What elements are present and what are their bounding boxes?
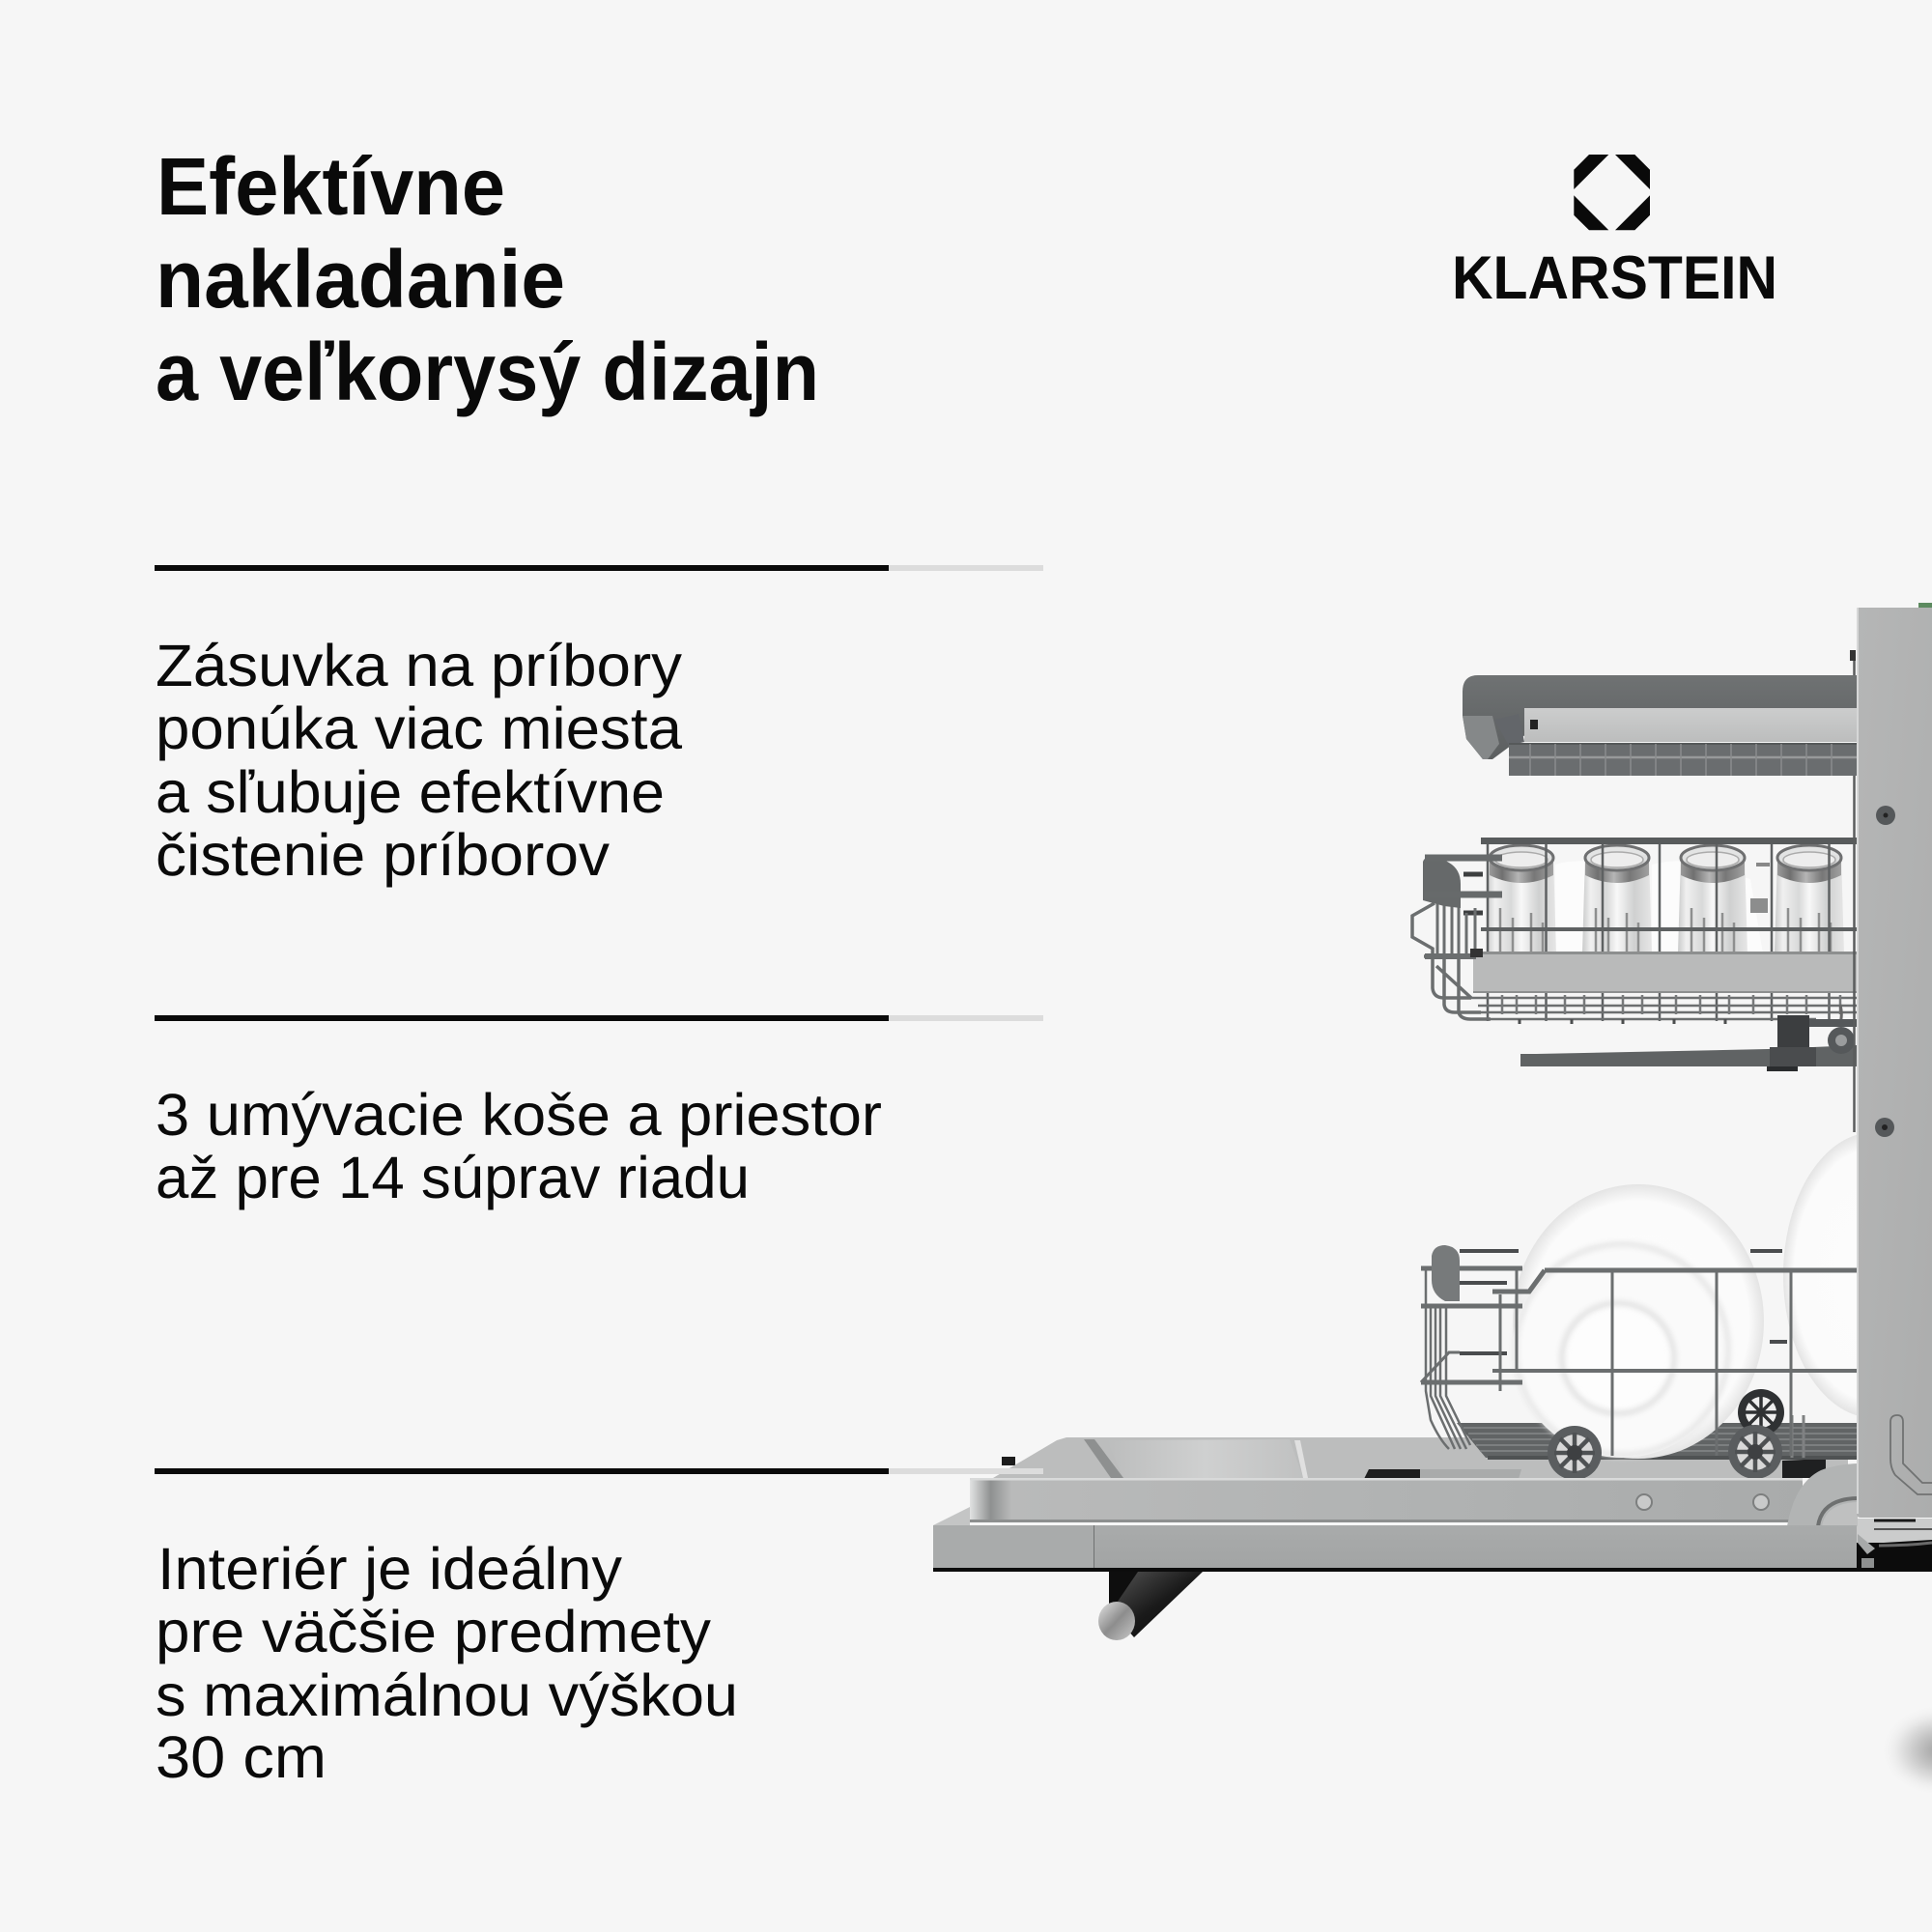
- basket wires: [1421, 1251, 1857, 1456]
- divider: [155, 565, 1043, 571]
- text: [156, 633, 683, 888]
- panel slot: [1890, 1415, 1932, 1494]
- title: [156, 141, 819, 417]
- spray arm: [1520, 1005, 1858, 1071]
- text: 30 cm: [156, 1724, 327, 1790]
- text: [156, 1082, 882, 1210]
- plate large: [1513, 1184, 1764, 1459]
- frame screw 2: [1753, 1494, 1769, 1510]
- rack wires: [1488, 844, 1830, 1021]
- frame screw 1: [1636, 1494, 1652, 1510]
- glass 1: [1487, 845, 1556, 953]
- plates behind glasses: [1555, 861, 1763, 953]
- title: Efektívne: [156, 141, 505, 232]
- basket floor: [1457, 1415, 1857, 1458]
- text: a sľubuje efektívne: [156, 759, 665, 825]
- side panel: [1850, 603, 1932, 1518]
- door frame: [970, 1478, 1803, 1522]
- divider: [155, 1015, 1043, 1021]
- text: s maximálnou výškou: [156, 1662, 738, 1728]
- glass 2: [1582, 845, 1652, 953]
- text: ponúka viac miesta: [156, 696, 682, 761]
- door handle: [1098, 1572, 1203, 1640]
- title: nakladanie: [156, 234, 565, 325]
- plate well: [1562, 1303, 1674, 1413]
- panel screw 1: [1876, 806, 1895, 825]
- section 3: interior: [155, 1468, 1043, 1790]
- text: 3 umývacie koše a priestor: [156, 1082, 882, 1148]
- wheel 2: [1728, 1425, 1782, 1479]
- plate front: [1513, 1241, 1731, 1458]
- title: a veľkorysý dizajn: [156, 327, 819, 417]
- dishwasher illustration: [933, 603, 1932, 1640]
- wheel 1: [1548, 1426, 1602, 1480]
- plate rear right: [1783, 1132, 1932, 1418]
- text: až pre 14 súprav riadu: [156, 1145, 750, 1210]
- text: [156, 1536, 738, 1790]
- panel screw 2: [1875, 1118, 1894, 1137]
- logo: Klarstein: [1452, 155, 1777, 312]
- upper cutlery drawer: [1463, 675, 1857, 776]
- text: Interiér je ideálny: [157, 1536, 623, 1602]
- section 2: baskets: [155, 1015, 1043, 1210]
- text: Zásuvka na príbory: [156, 633, 683, 698]
- text: čistenie príborov: [156, 822, 611, 888]
- door front fascia: [933, 1507, 1932, 1572]
- rear machinery below panel: [1857, 1519, 1932, 1572]
- lower basket with plates: [1421, 1132, 1932, 1480]
- light front bar: [1473, 953, 1857, 992]
- glass 3: [1678, 845, 1747, 953]
- section 1: cutlery drawer: [155, 565, 1043, 888]
- divider: [155, 1468, 1043, 1474]
- icon: logo mark: [1574, 155, 1650, 230]
- glass 4: [1775, 845, 1844, 953]
- rack lower wires: [1471, 998, 1857, 1019]
- text: pre väčšie predmety: [156, 1599, 712, 1664]
- rack handle: [1412, 874, 1491, 1019]
- logo wordmark: KLARSTEIN: [1452, 244, 1777, 312]
- door tub interior: [993, 1437, 1848, 1479]
- middle rack with glasses: [1412, 838, 1857, 1024]
- shadow smudge bottom right: [1880, 1704, 1932, 1797]
- back wheel: [1738, 1389, 1784, 1435]
- hinge: [1787, 1463, 1858, 1526]
